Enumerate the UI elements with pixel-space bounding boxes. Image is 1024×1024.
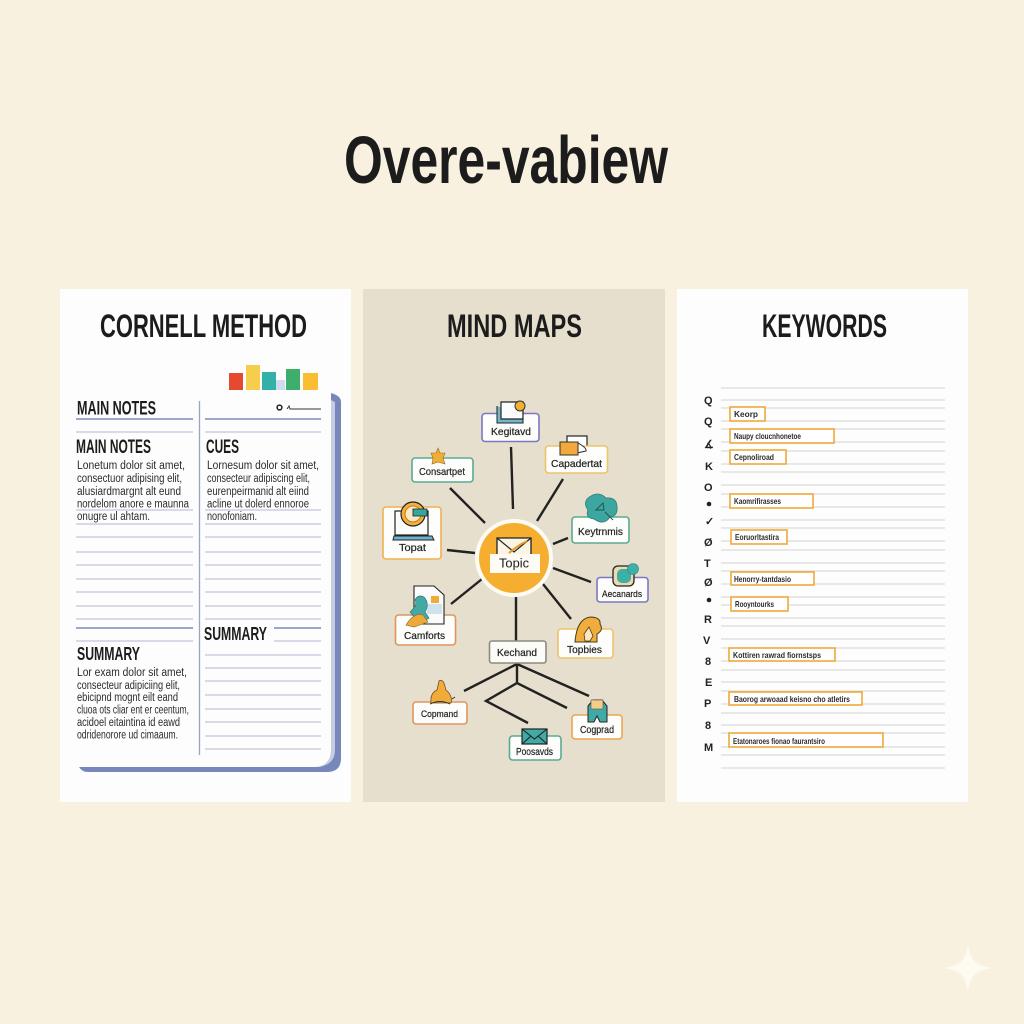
node: camforts [396,586,456,645]
text block: summary: acidoel eitaintina id eawd [77,717,180,729]
keyword tags: Kottiren rawrad fiornstsps [733,650,821,660]
heading: mind maps: MIND MAPS [447,308,582,344]
left column symbols: M [704,742,713,754]
text block: summary: odridenorore ud cimaaum. [77,730,178,742]
node: camforts: Camforts [404,630,445,642]
connector lines [447,447,591,723]
panel: keywords [677,289,968,802]
text block: main notes: MAIN NOTES [76,437,151,458]
icon: coloured bars [229,365,318,390]
text block: cues [206,437,319,523]
node: topbies [558,617,613,658]
heading: main notes top: MAIN NOTES [77,398,156,420]
hub: topic [475,519,553,597]
text block: cues: CUES [206,437,239,458]
text block: main notes: alusiardmargnt alt eund [77,486,181,498]
keyword tags: Keorp [734,409,758,419]
left column symbols: R [704,614,712,626]
keyword tags: Rooyntourks [735,599,774,609]
text block: cues: acline ut dolerd ennoroe [207,498,309,510]
node: keyword [482,401,539,442]
node: poosavds [510,729,561,760]
left column symbols: P [704,698,711,710]
node: kechand: Kechand [497,647,537,659]
keyword tags: Henorry-tantdasio [734,574,791,584]
heading: Cornell method: CORNELL METHOD [100,308,307,344]
node: concept [412,448,473,482]
keyword tags: Baorog arwoaad keisno cho atletirs [734,694,850,704]
node: cogprad [572,700,622,739]
icon: small pen mark [277,405,321,410]
left column symbols: Q [704,416,713,428]
node: aecanards: Aecanards [602,589,642,600]
text block: cues: consecteur adipiscing elit, [207,473,310,485]
panel: mind maps [363,289,665,802]
icon: sparkle watermark [943,944,993,992]
node: poosavds: Poosavds [516,746,553,758]
keyword tags: Naupy cloucnhonetoe [734,431,801,441]
text block: summary: Lor exam dolor sit amet, [77,667,187,679]
left column symbols: Q [704,395,713,407]
node: keytrnmis: Keytrnmis [578,526,623,538]
panel: Cornell method [60,289,351,802]
node: keyword: Kegitavd [491,426,531,438]
text block: cues: eurenpeirmanid alt eiind [207,486,309,498]
text block: main notes: nordelom anore e maunna [77,498,189,510]
text block: cues: nonofoniam. [207,511,257,523]
node: topbies: Topbies [567,644,602,656]
node: topat: Topat [399,542,426,554]
left column symbols: V [703,635,711,647]
text block: summary: ebicipnd mognt eilt eand [77,692,178,704]
keyword tags: Etatonaroes fionao faurantsiro [733,736,825,746]
left column symbols [703,395,714,754]
keyword tags: Eoruorltastira [735,532,779,542]
node: capadertat: Capadertat [551,458,602,470]
heading: keywords: KEYWORDS [762,308,887,344]
node: capadertat [546,436,608,473]
left column symbols: T [704,558,711,570]
title: Overe-vabiew [344,123,669,198]
keyword tags: Cepnoliroad [734,452,774,462]
text block: main notes: Lonetum dolor sit amet, [77,460,185,472]
node: topat [383,502,441,559]
node: kechand [490,641,546,663]
left column symbols: O [704,482,713,494]
text block: summary: SUMMARY [77,644,140,664]
node: cogprad: Cogprad [580,724,614,736]
heading: summary right: SUMMARY [204,624,267,644]
left column symbols: Ø [704,537,713,549]
left column symbols: ✓ [705,516,714,528]
keyword tags [729,407,883,747]
text block: summary: cluoa ots cliar ent er ceentum, [77,704,189,716]
notebook rules [76,401,321,755]
text block: main notes [76,437,189,523]
keyword tags: Kaomrifirasses [734,496,781,506]
node: copmand: Copmand [421,709,458,720]
text block: main notes: consectuor adipising elit, [77,473,182,485]
left column symbols: 8 [705,720,711,732]
node: concept: Consartpet [419,466,465,478]
text block: cues: Lornesum dolor sit amet, [207,460,319,472]
notebook page [76,393,341,772]
node: keytrnmis [572,494,629,543]
text block: summary: consecteur adipiciing elit, [77,680,180,692]
hub: topic: Topic [499,556,529,570]
left column symbols: 8 [705,656,711,668]
keyword rules [721,388,945,768]
text block: summary [77,644,189,742]
left column symbols: Ø [704,577,713,589]
left column symbols: ∡ [704,439,714,451]
text block: main notes: onugre ul ahtam. [77,511,150,523]
node: aecanards [597,564,648,602]
left column symbols: E [705,677,712,689]
node: copmand [413,680,467,724]
left column symbols: K [705,461,713,473]
